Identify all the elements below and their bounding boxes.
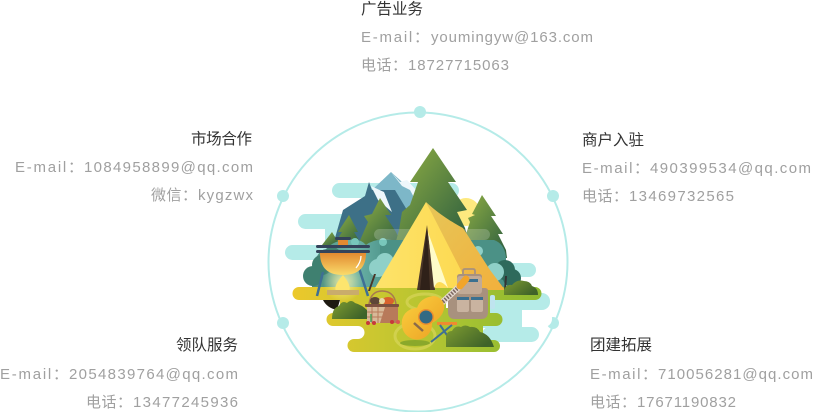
contact: advertising: E-mail： (361, 29, 429, 46)
tent (368, 202, 507, 291)
light paths on ground (395, 294, 443, 349)
contact: team building: 团建拓展 (590, 336, 652, 354)
contact: market cooperation: kygzwx (198, 187, 254, 204)
contact: guide services: 13477245936 (133, 394, 238, 411)
contact: merchant onboarding: 490399534@qq.com (650, 160, 811, 177)
small pine tree (462, 195, 507, 258)
contact: advertising: 18727715063 (408, 57, 509, 74)
contact: guide services: 2054839764@qq.com (69, 366, 238, 383)
left bush (332, 301, 367, 319)
contact: merchant onboarding: 电话： (582, 188, 628, 205)
contact: advertising: 电话： (361, 57, 407, 74)
shrubs behind the tent (303, 238, 521, 288)
contact: team building: 710056281@qq.com (658, 366, 813, 383)
contact: market cooperation: 1084958899@qq.com (84, 159, 253, 176)
mountains (335, 172, 420, 245)
bottom right bush (446, 326, 494, 347)
top right bush (504, 280, 538, 295)
left pine trees (322, 198, 402, 245)
backpack (446, 269, 495, 319)
ground (292, 287, 542, 352)
contact: market cooperation (15, 130, 254, 204)
ring with connector dots (268, 106, 568, 412)
black pot shadow (323, 300, 340, 310)
contact: market cooperation: E-mail： (15, 159, 83, 176)
contact: merchant onboarding: 13469732565 (629, 188, 734, 205)
clouds (285, 183, 552, 342)
contact: advertising: youmingyw@163.com (431, 29, 593, 46)
camping stool (431, 322, 457, 342)
contact: guide services: E-mail： (0, 366, 68, 383)
contact: guide services: 领队服务 (176, 336, 238, 354)
contact: market cooperation: 市场合作 (191, 130, 252, 148)
contact: team building: 17671190832 (637, 394, 736, 411)
contact: team building (590, 336, 813, 411)
haze band (374, 229, 490, 240)
contact: market cooperation: 微信： (151, 187, 197, 204)
sun (452, 198, 480, 226)
contact: guide services: 电话： (86, 394, 132, 411)
picnic basket (365, 291, 400, 325)
guitar (400, 279, 466, 346)
contact: advertising (361, 0, 593, 74)
contact: team building: E-mail： (590, 366, 657, 383)
illustration: camping scene (285, 148, 552, 352)
contact: merchant onboarding: E-mail： (582, 160, 649, 177)
contact: guide services (0, 336, 238, 411)
contact: merchant onboarding (582, 131, 811, 205)
contact: team building: 电话： (590, 394, 636, 411)
grill (316, 237, 370, 302)
large pine tree (395, 148, 470, 245)
contact: merchant onboarding: 商户入驻 (582, 131, 644, 149)
contact: advertising: 广告业务 (361, 0, 423, 18)
